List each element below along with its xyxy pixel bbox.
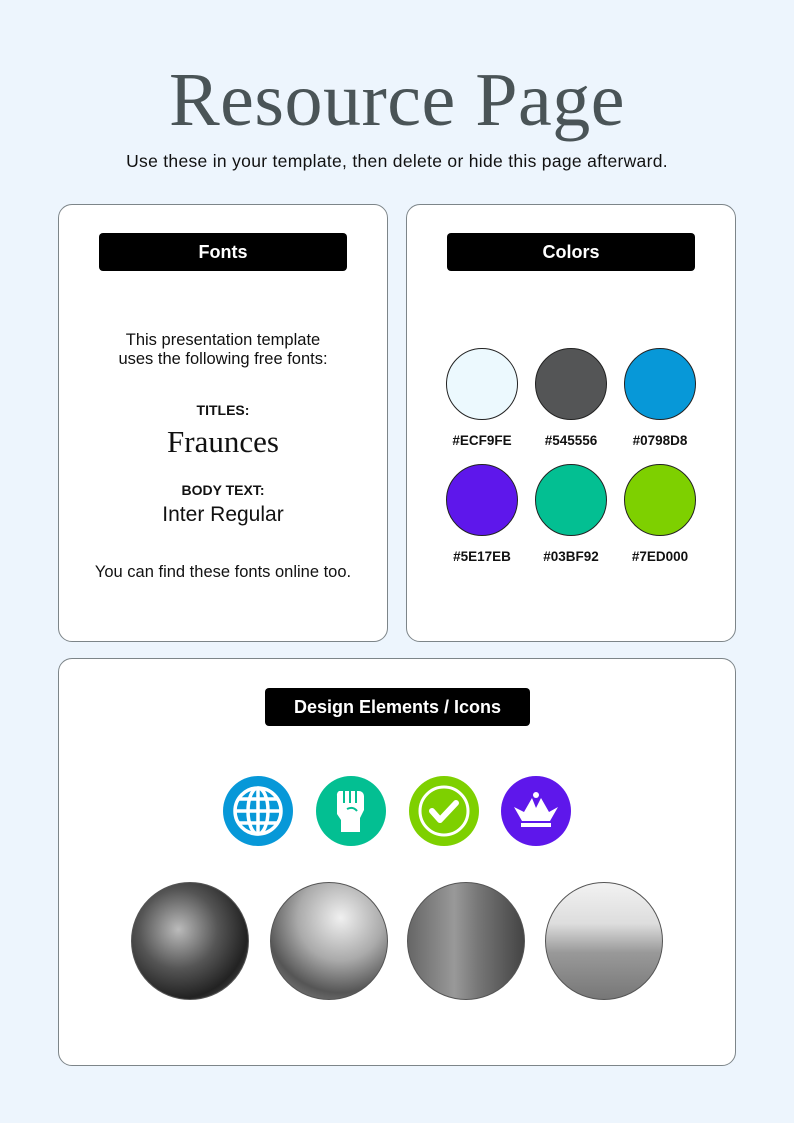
- text: Fraunces: Fraunces: [167, 424, 279, 459]
- icon: fist: [316, 776, 386, 846]
- photo: hands: [131, 882, 249, 1000]
- heading: colors: Colors: [542, 242, 600, 262]
- panel: design elements: [58, 658, 736, 1066]
- icon: check: [409, 776, 479, 846]
- swatches: [446, 348, 696, 564]
- text: footer: You can find these fonts online too.: [95, 563, 351, 581]
- swatches: #5E17EB: [453, 549, 511, 564]
- title: Resource Page: [169, 58, 625, 142]
- heading: fonts: [99, 233, 347, 271]
- text: titles label: TITLES:: [197, 402, 249, 418]
- swatches: #03BF92: [543, 549, 599, 564]
- photo: statue: [407, 882, 525, 1000]
- heading: design elements: Design Elements / Icons: [294, 697, 501, 717]
- text: intro: [118, 331, 328, 368]
- panel: colors: [406, 204, 736, 642]
- swatches: #7ED000: [632, 549, 688, 564]
- icon: crown: [501, 776, 571, 846]
- heading: fonts: Fonts: [198, 242, 248, 262]
- subtitle: Use these in your template, then delete or hide this page afterward.: [126, 151, 668, 171]
- panel: fonts: [58, 204, 388, 642]
- icon: globe: [223, 776, 293, 846]
- heading: design elements: [265, 688, 530, 726]
- photo: group: [270, 882, 388, 1000]
- photo: capitol: [545, 882, 663, 1000]
- icons row: [223, 776, 571, 846]
- text: intro: uses the following free fonts:: [118, 350, 328, 368]
- swatches: #545556: [545, 433, 597, 448]
- text: intro: This presentation template: [126, 331, 320, 349]
- text: Inter: Inter Regular: [162, 503, 284, 526]
- swatches: #0798D8: [633, 433, 687, 448]
- heading: colors: [447, 233, 695, 271]
- text: body label: BODY TEXT:: [182, 482, 264, 498]
- swatches: #ECF9FE: [452, 433, 512, 448]
